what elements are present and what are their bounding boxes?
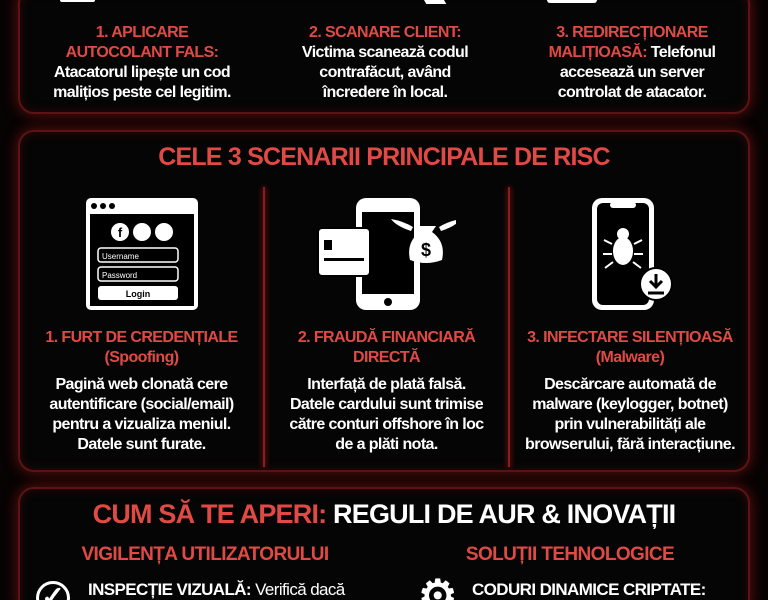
text: step 1: AUTOCOLANT FALS: <box>66 44 218 61</box>
heading: CUM SĂ TE APERI: REGULI DE AUR & INOVAȚII <box>93 499 675 529</box>
text: step 1: 1. APLICARE <box>96 24 188 41</box>
text: step 3: accesează un server <box>560 64 704 81</box>
text: step 3: controlat de atacator. <box>558 84 706 101</box>
subheading: tech solutions: SOLUȚII TEHNOLOGICE <box>466 544 674 565</box>
icon: phone with card and money bag <box>319 198 456 310</box>
text: scenario 2: DIRECTĂ Interfață de plată falsă. <box>307 349 466 393</box>
text: step 3: MALIȚIOASĂ: Telefonul <box>549 44 715 61</box>
text: step 3: 3. REDIRECȚIONARE <box>556 24 708 41</box>
text: scenario 2: 2. FRAUDĂ FINANCIARĂ <box>298 329 475 346</box>
text: scenario 3: 3. INFECTARE SILENȚIOASĂ <box>527 329 733 346</box>
text: scenario 1: autentificare (social/email) <box>49 396 234 413</box>
panel: attack steps <box>18 0 750 114</box>
text: scenario 1: pentru a vizualiza meniul. <box>52 416 231 433</box>
panel: risk scenarios <box>18 130 750 472</box>
icon: step 3 top <box>547 0 597 3</box>
item: visual inspection: INSPECȚIE VIZUALĂ: Verifică dacă <box>88 580 345 599</box>
text: scenario 3: prin vulnerabilități ale <box>554 416 705 433</box>
text: step 3 <box>549 24 715 101</box>
icon: login browser <box>86 198 198 310</box>
item: dynamic codes: CODURI DINAMICE CRIPTATE: <box>472 580 706 599</box>
text: scenario 3 <box>525 328 735 453</box>
text: step 2: contrafăcut, având <box>319 64 451 81</box>
text: scenario 2: Datele cardului sunt trimise <box>290 396 483 413</box>
text: scenario 2: către conturi offshore în loc <box>289 416 484 433</box>
icon: phone with card and money bag: $ <box>421 240 431 260</box>
icon: login browser: Login <box>126 289 150 299</box>
text: step 1: Atacatorul lipește un cod <box>54 64 230 81</box>
icon: login browser: f <box>118 225 123 240</box>
heading: CELE 3 SCENARII PRINCIPALE DE RISC <box>158 143 610 171</box>
text: scenario 1: Datele sunt furate. <box>77 436 206 453</box>
icon: step 2 top <box>422 0 446 4</box>
icon: login browser: Password <box>102 271 137 280</box>
text: scenario 3: malware (keylogger, botnet) <box>532 396 728 413</box>
icon: check <box>36 581 70 600</box>
icon: phone with bug <box>592 198 671 310</box>
text: step 2: încredere în local. <box>323 84 447 101</box>
icon: step 1 top <box>60 0 95 2</box>
text: step 1: malițios peste cel legitim. <box>53 84 231 101</box>
text: step 2 <box>302 24 468 101</box>
icon: login browser: Username <box>102 252 139 261</box>
text: step 2: Victima scanează codul <box>302 44 468 61</box>
text: scenario 3: (Malware) Descărcare automată de <box>544 349 716 393</box>
text: scenario 1: (Spoofing) Pagină web clonată cere <box>55 349 228 393</box>
text: scenario 3: browserului, fără interacțiune. <box>525 436 735 453</box>
text: step 2: 2. SCANARE CLIENT: <box>309 24 461 41</box>
text: step 1 <box>53 24 231 101</box>
subheading: user vigilance: VIGILENȚA UTILIZATORULUI <box>81 544 328 565</box>
panel: defense <box>18 487 750 600</box>
text: scenario 1: 1. FURT DE CREDENȚIALE <box>45 329 238 346</box>
text: scenario 1 <box>45 329 238 453</box>
text: scenario 2 <box>289 328 484 453</box>
text: scenario 2: de a plăti nota. <box>335 436 438 453</box>
